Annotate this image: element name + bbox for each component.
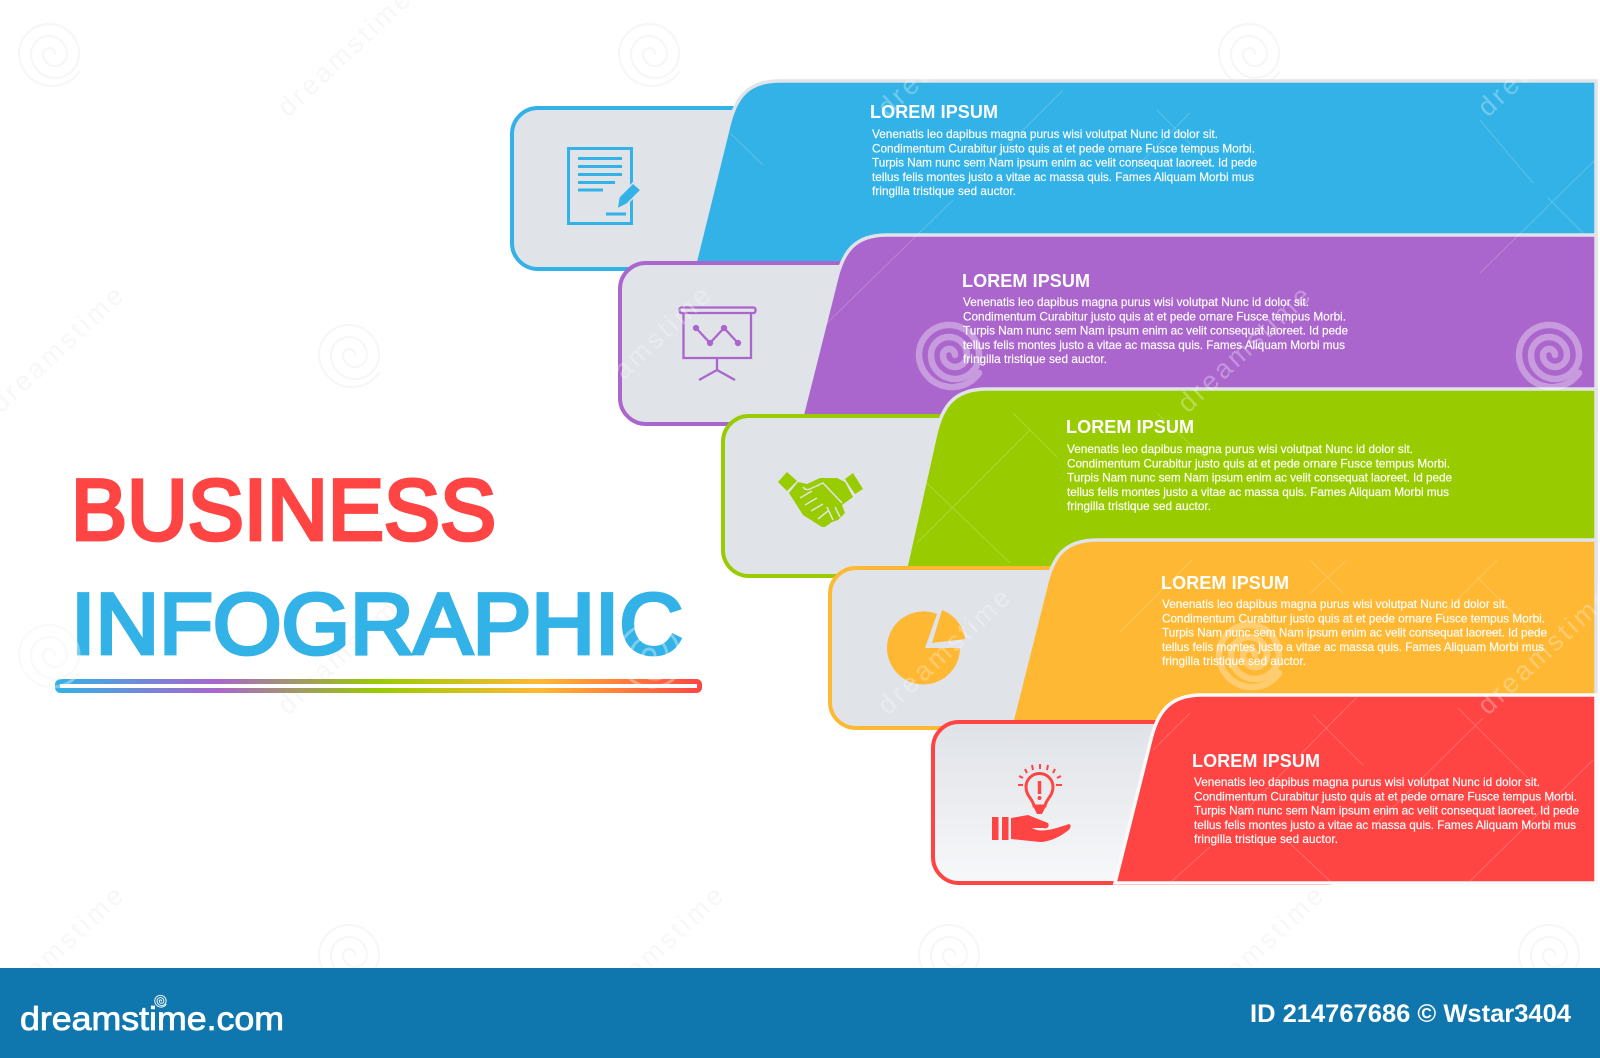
watermark on white background: dreamstime	[271, 582, 416, 720]
text block: purple	[962, 271, 1348, 366]
icon: handshake	[778, 472, 863, 527]
footer logo: dreamstime.com	[20, 1000, 284, 1037]
watermark on white background: dreamstime	[1184, 880, 1329, 1018]
text block: purple: LOREM IPSUM	[962, 271, 1090, 291]
watermark over coloured panels: dreamstime	[871, 582, 1016, 720]
text block: green: tellus felis montes justo a vitae ac massa quis. Fames Aliquam Morbi mus	[1067, 485, 1449, 499]
panel: step 5 red	[933, 695, 1596, 883]
text block: purple: Turpis Nam nunc sem Nam ipsum enim ac velit consequat laoreet. Id pede	[963, 324, 1348, 338]
footer bar	[0, 968, 1600, 1058]
text block: green: Condimentum Curabitur justo quis at et pede ornare Fusce tempus Morbi.	[1067, 456, 1450, 470]
text block: red: fringilla tristique sed auctor.	[1194, 832, 1338, 846]
colour band: orange	[1009, 540, 1596, 733]
panel: step 2 purple	[620, 235, 1596, 428]
icon box: purple	[620, 263, 1040, 424]
text block: green	[1066, 417, 1452, 513]
text block: purple: Condimentum Curabitur justo quis at et pede ornare Fusce tempus Morbi.	[963, 309, 1346, 323]
text block: red: LOREM IPSUM	[1192, 751, 1320, 771]
icon: light bulb over hand	[992, 764, 1071, 842]
icon box: blue	[512, 108, 932, 269]
watermark over coloured panels: dreamstime	[1171, 280, 1316, 418]
icon box: green	[723, 416, 1143, 576]
panel: step 1 blue	[512, 81, 1596, 275]
text block: purple: fringilla tristique sed auctor.	[963, 352, 1107, 366]
text block: red: Turpis Nam nunc sem Nam ipsum enim ac velit consequat laoreet. Id pede	[1194, 804, 1579, 818]
colour band: purple	[799, 235, 1596, 428]
text block: green: LOREM IPSUM	[1066, 417, 1194, 437]
icon box: red	[933, 722, 1353, 883]
title line: infographic: INFOGRAPHIC	[71, 576, 683, 672]
footer image id: ID 214767686 © Wstar3404	[1250, 1000, 1571, 1028]
panel: step 4 orange	[830, 540, 1596, 733]
text block: purple: Venenatis leo dapibus magna purus wisi volutpat Nunc id dolor sit.	[963, 295, 1309, 309]
text block: orange: Turpis Nam nunc sem Nam ipsum enim ac velit consequat laoreet. Id pede	[1162, 626, 1547, 640]
watermark on white background: dreamstime	[584, 880, 729, 1018]
text block: blue: Turpis Nam nunc sem Nam ipsum enim ac velit consequat laoreet. Id pede	[872, 156, 1257, 170]
text block: red: Venenatis leo dapibus magna purus wisi volutpat Nunc id dolor sit.	[1194, 775, 1540, 789]
text block: orange: Condimentum Curabitur justo quis at et pede ornare Fusce tempus Morbi.	[1162, 611, 1545, 625]
text block: blue: tellus felis montes justo a vitae ac massa quis. Fames Aliquam Morbi mus	[872, 170, 1254, 184]
text block: red: tellus felis montes justo a vitae ac massa quis. Fames Aliquam Morbi mus	[1194, 818, 1576, 832]
colour band: red	[1115, 695, 1596, 883]
text block: green: Venenatis leo dapibus magna purus wisi volutpat Nunc id dolor sit.	[1067, 442, 1413, 456]
text block: orange: LOREM IPSUM	[1161, 573, 1289, 593]
text block: red: Condimentum Curabitur justo quis at et pede ornare Fusce tempus Morbi.	[1194, 789, 1577, 803]
text block: orange: tellus felis montes justo a vitae ac massa quis. Fames Aliquam Morbi mus	[1162, 640, 1544, 654]
text block: blue: Condimentum Curabitur justo quis at et pede ornare Fusce tempus Morbi.	[872, 141, 1255, 155]
text block: orange: fringilla tristique sed auctor.	[1162, 654, 1306, 668]
text block: purple: tellus felis montes justo a vitae ac massa quis. Fames Aliquam Morbi mus	[963, 338, 1345, 352]
colour band: blue	[692, 81, 1596, 275]
icon box: orange	[830, 568, 1250, 728]
title: business infographic	[71, 462, 683, 672]
text block: blue: Venenatis leo dapibus magna purus wisi volutpat Nunc id dolor sit.	[872, 127, 1218, 141]
text block: blue: fringilla tristique sed auctor.	[872, 184, 1016, 198]
colour band: green	[903, 389, 1596, 580]
text block: blue: LOREM IPSUM	[870, 102, 998, 122]
text block: orange	[1161, 573, 1547, 668]
text block: green: Turpis Nam nunc sem Nam ipsum enim ac velit consequat laoreet. Id pede	[1067, 471, 1452, 485]
title line: business: BUSINESS	[71, 462, 496, 558]
text block: blue	[870, 102, 1257, 198]
text block: green: fringilla tristique sed auctor.	[1067, 499, 1211, 513]
text block: orange: Venenatis leo dapibus magna purus wisi volutpat Nunc id dolor sit.	[1162, 597, 1508, 611]
icon: document and pen	[568, 148, 641, 224]
watermark over coloured panels: dreamstime	[571, 280, 716, 418]
rainbow underline	[58, 682, 700, 690]
text block: red	[1192, 751, 1579, 846]
icon: presentation board	[680, 308, 756, 380]
icon: pie chart	[887, 610, 965, 684]
panel: step 3 green	[723, 389, 1596, 580]
